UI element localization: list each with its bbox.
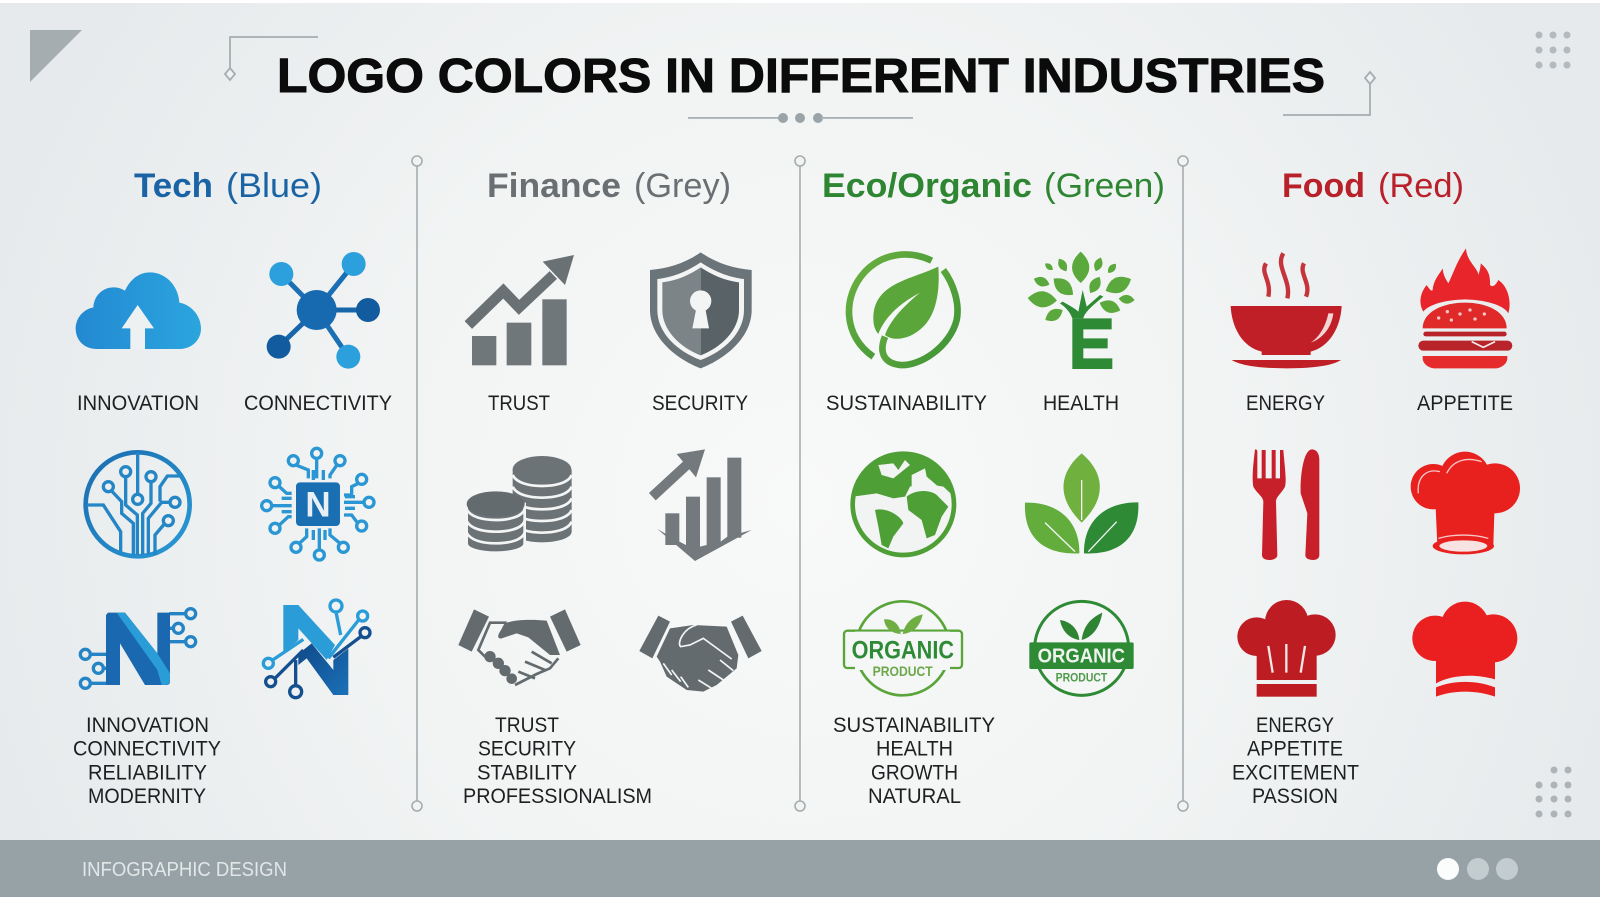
text block: tech attributes: RELIABILITY: [88, 762, 207, 784]
footer text: INFOGRAPHIC DESIGN: [82, 859, 287, 881]
icon: N logo with nodes: [80, 609, 196, 688]
text block: eco attributes: NATURAL: [868, 785, 961, 808]
text block: eco attributes: [833, 714, 995, 808]
heading: tech: Tech: [134, 167, 213, 205]
panel: finance: [458, 167, 762, 808]
text block: eco attributes: GROWTH: [871, 762, 958, 784]
icon: chip with N: [262, 448, 374, 560]
bottom-right dot grid: [1536, 766, 1572, 818]
text block: food attributes: [1232, 714, 1359, 808]
heading: finance: Finance: [487, 167, 621, 205]
text block: finance attributes: PROFESSIONALISM: [463, 785, 652, 808]
corner triangle: [30, 30, 82, 82]
heading: food: [1282, 167, 1464, 205]
column dividers: [412, 156, 1188, 811]
icon: organic badge dark: PRODUCT: [1056, 672, 1107, 685]
label: appetite: APPETITE: [1417, 392, 1513, 415]
heading: food: Food: [1282, 167, 1365, 205]
icon: chef hat with rim: [1411, 452, 1520, 554]
top-right dot grid: [1536, 32, 1570, 68]
icon: chip with N: N: [305, 486, 331, 525]
text block: food attributes: APPETITE: [1247, 738, 1343, 760]
text block: food attributes: EXCITEMENT: [1232, 762, 1359, 784]
icon: leaf ring: [849, 254, 958, 365]
label: connectivity: CONNECTIVITY: [244, 392, 392, 415]
text block: finance attributes: [463, 714, 652, 808]
label: innovation: INNOVATION: [77, 392, 199, 415]
heading: finance: (Grey): [634, 167, 731, 205]
icon: tree with E: [1027, 252, 1135, 369]
icon: organic badge dark: [1029, 601, 1134, 695]
footer bar: [0, 840, 1600, 897]
text block: tech attributes: [73, 714, 221, 808]
icon: globe: [853, 453, 954, 555]
icon: network nodes: [267, 252, 380, 369]
label: energy: ENERGY: [1246, 392, 1325, 415]
text block: finance attributes: TRUST: [495, 714, 559, 737]
heading: eco: (Green): [1044, 167, 1165, 205]
heading: food: (Red): [1378, 167, 1464, 205]
icon: handshake solid: [639, 616, 762, 692]
icon: fork and knife: [1253, 449, 1319, 560]
text block: tech attributes: MODERNITY: [88, 785, 206, 808]
text block: eco attributes: SUSTAINABILITY: [833, 714, 995, 737]
icon: growth chart: [468, 255, 574, 365]
panel: tech: [73, 167, 392, 808]
footer pager dots: [1437, 858, 1518, 880]
title bracket right: [1283, 72, 1375, 115]
icon: cloud upload: [76, 272, 201, 349]
icon: steaming bowl: [1231, 253, 1342, 368]
label: trust: TRUST: [488, 392, 550, 415]
icon: shield with keyhole: [650, 252, 752, 368]
heading: finance: [487, 167, 731, 205]
panel: food: [1231, 167, 1520, 808]
text block: food attributes: PASSION: [1252, 785, 1338, 808]
icon: circuit globe: [86, 452, 190, 556]
text block: finance attributes: STABILITY: [477, 762, 577, 784]
icon: N circuit logo: [263, 600, 370, 698]
text block: finance attributes: SECURITY: [478, 738, 576, 760]
icon: flaming burger: [1418, 248, 1512, 368]
icon: coin stacks: [467, 456, 572, 553]
title: LOGO COLORS IN DIFFERENT INDUSTRIES: [277, 50, 1325, 103]
icon: organic badge light: ORGANIC: [852, 636, 954, 664]
heading: eco: Eco/Organic: [822, 167, 1032, 205]
icon: handshake outline: [458, 609, 581, 685]
title bracket left: [225, 37, 318, 80]
icon: organic badge light: [844, 601, 962, 695]
icon: chef hat bright: [1412, 602, 1517, 697]
label: security: SECURITY: [652, 392, 748, 415]
icon: organic badge dark: ORGANIC: [1038, 646, 1125, 668]
heading: eco: [822, 167, 1165, 205]
text block: tech attributes: INNOVATION: [86, 714, 209, 737]
text block: eco attributes: HEALTH: [876, 738, 953, 760]
icon: organic badge light: PRODUCT: [873, 663, 933, 679]
label: sustainability: SUSTAINABILITY: [826, 392, 987, 415]
icon: arrow and bar chart: [652, 449, 752, 561]
panel: eco: [822, 167, 1165, 808]
title rule: [688, 113, 913, 123]
label: health: HEALTH: [1043, 392, 1119, 415]
text block: food attributes: ENERGY: [1256, 714, 1334, 737]
text block: tech attributes: CONNECTIVITY: [73, 738, 221, 760]
heading: tech: [134, 167, 322, 205]
icon: chef hat dark: [1237, 600, 1336, 697]
icon: three leaves: [1025, 453, 1138, 553]
heading: tech: (Blue): [226, 167, 322, 205]
